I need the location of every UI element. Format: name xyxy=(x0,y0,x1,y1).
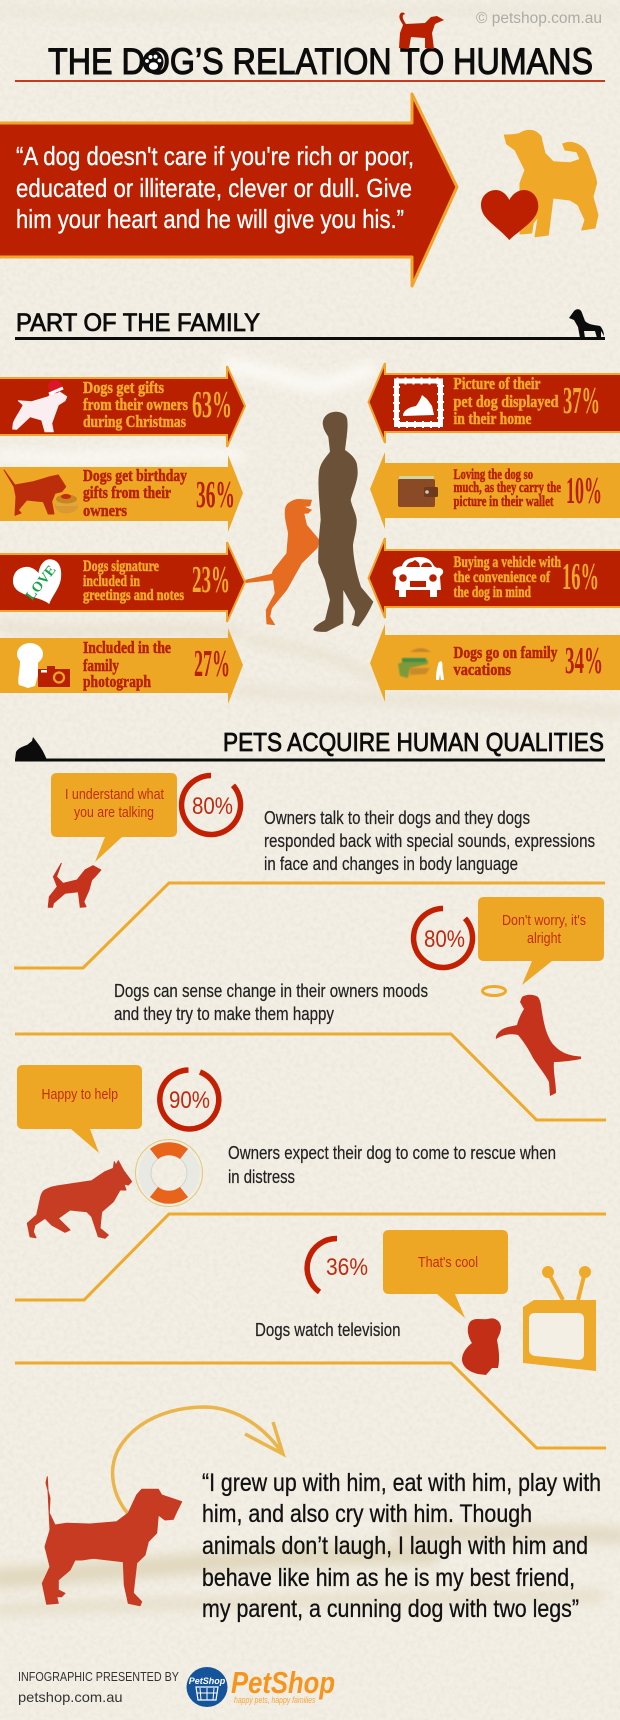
icon: white dog with camera xyxy=(17,643,70,688)
speech bubble xyxy=(17,1065,142,1153)
icon: red dog standing on title xyxy=(399,12,444,49)
panel: dogs get gifts during Christmas: from their owners xyxy=(83,395,188,414)
panel: dogs get gifts during Christmas: Dogs get gifts xyxy=(83,378,164,397)
panel: dogs rescue: Owners expect their dog to come to rescue when xyxy=(228,1142,556,1163)
panel: dogs sense moods: Dogs can sense change in their owners moods xyxy=(114,980,428,1001)
banner arrow with quote: “A dog doesn't care if you're rich or poor, xyxy=(16,141,414,171)
panel: picture in the wallet xyxy=(370,452,620,529)
icon: television xyxy=(523,1266,596,1371)
speech bubble xyxy=(478,897,604,985)
panel: dogs signature in greetings: greetings and notes xyxy=(83,587,184,604)
icon: white car with dog xyxy=(393,557,443,597)
icon: white heart with love: LOVE xyxy=(23,563,60,604)
icon: dog xyxy=(48,863,101,907)
speech bubble xyxy=(51,773,177,862)
orange dog xyxy=(246,499,319,625)
panel: buying a vehicle xyxy=(368,538,620,618)
ring chart 36% xyxy=(307,1238,368,1292)
panel: dogs go on family vacations: Dogs go on family xyxy=(454,643,558,662)
panel: picture of dog in the home: pet dog displayed xyxy=(454,392,559,411)
ring chart 80% xyxy=(414,908,473,968)
footer: presenter credit xyxy=(18,1670,180,1705)
logo: petshop round badge: PetShop xyxy=(189,1676,226,1686)
panel: dogs watch television: Dogs watch television xyxy=(255,1319,400,1340)
icon: life buoy xyxy=(136,1140,202,1206)
panel: dogs talk xyxy=(48,773,595,907)
logo: petshop wordmark: PetShop xyxy=(231,1665,335,1700)
banner arrow with quote: educated or illiterate, clever or dull. Give xyxy=(16,173,412,203)
ring chart 80%: 80% xyxy=(192,793,233,820)
logo: petshop wordmark: happy pets, happy families xyxy=(234,1695,316,1705)
illustration: dog jumping on person xyxy=(246,412,373,632)
panel: dogs get gifts during Christmas: 63% xyxy=(192,384,232,426)
panel: dogs signature in greetings: 23% xyxy=(192,559,230,601)
panel: dogs watch television xyxy=(255,1230,596,1375)
panel: dogs signature in greetings xyxy=(0,542,245,622)
panel: dogs get birthday gifts: owners xyxy=(83,501,127,520)
icon: paw inside the letter O xyxy=(142,50,164,74)
panel: included in the family photograph: family xyxy=(83,656,119,675)
ring chart 80%: 80% xyxy=(424,926,465,953)
panel: picture of dog in the home xyxy=(368,363,620,443)
icon: black cat xyxy=(15,737,47,760)
panel: dogs get birthday gifts: 36% xyxy=(196,474,235,516)
panel: buying a vehicle: the dog in mind xyxy=(454,584,531,601)
panel: dogs get gifts during Christmas xyxy=(0,366,245,447)
speech bubble: Happy to help xyxy=(42,1086,118,1103)
speech bubble: That's cool xyxy=(418,1254,478,1271)
icon: deck chair and small dog xyxy=(398,648,444,680)
panel: included in the family photograph xyxy=(0,628,243,704)
logo: petshop round badge xyxy=(186,1667,228,1707)
panel: dogs sense moods xyxy=(114,897,604,1096)
panel: closing quote: him, and also cry with him. Though xyxy=(202,1500,532,1528)
icon: white framed dog picture xyxy=(396,381,440,424)
panel: included in the family photograph: 27% xyxy=(194,643,230,685)
banner arrow with quote: him your heart and he will give you his.” xyxy=(16,204,404,234)
icon: shepherd dog xyxy=(27,1161,132,1238)
icon: puppy xyxy=(462,1318,501,1375)
icon: bloodhound xyxy=(42,1477,182,1606)
panel: buying a vehicle: the convenience of xyxy=(454,569,551,586)
panel: dogs rescue: in distress xyxy=(228,1166,295,1187)
panel: dogs get gifts during Christmas: during Christmas xyxy=(83,412,186,431)
panel: closing quote xyxy=(42,1407,601,1623)
footer: presenter credit: petshop.com.au xyxy=(18,1689,123,1705)
heading: part of the family: PART OF THE FAMILY xyxy=(16,309,260,337)
panel: dogs get birthday gifts: Dogs get birthday xyxy=(83,466,187,485)
panel: dogs sense moods: and they try to make them happy xyxy=(114,1003,335,1024)
ring chart 90% xyxy=(160,1070,219,1129)
panel: dogs talk: Owners talk to their dogs and they dogs xyxy=(264,807,530,828)
panel: dogs go on family vacations: vacations xyxy=(454,660,511,679)
panel: dogs talk: in face and changes in body language xyxy=(264,853,518,874)
panel: picture in the wallet: picture in their wallet xyxy=(454,494,554,510)
panel: dogs rescue xyxy=(17,1065,556,1238)
banner arrow with quote xyxy=(0,94,457,286)
speech bubble: Don't worry, it's xyxy=(502,912,586,929)
icon: white heart with love xyxy=(13,559,61,604)
icon: jumping dog xyxy=(496,995,581,1096)
panel: dogs signature in greetings: Dogs signature xyxy=(83,558,159,575)
panel: dogs get birthday gifts xyxy=(0,455,243,532)
panel: picture in the wallet: much, as they carry the xyxy=(454,480,561,496)
panel: picture in the wallet: Loving the dog so xyxy=(454,467,533,483)
icon: black dog xyxy=(569,309,604,338)
panel: picture of dog in the home: in their home xyxy=(454,409,532,428)
panel: included in the family photograph: photograph xyxy=(83,672,151,691)
speech bubble xyxy=(383,1230,508,1318)
icon: heart xyxy=(481,190,538,240)
arrow: curved xyxy=(113,1407,283,1515)
icon: dog and birthday cake xyxy=(4,470,78,515)
icon: white dog with santa hat xyxy=(13,380,67,432)
footer: presenter credit: INFOGRAPHIC PRESENTED BY xyxy=(18,1670,180,1684)
copyright note: © petshop.com.au xyxy=(476,10,602,27)
panel: dogs go on family vacations xyxy=(370,624,620,702)
speech bubble: alright xyxy=(527,930,562,947)
icon: frisbee xyxy=(482,986,506,996)
icon: brown wallet xyxy=(398,476,438,507)
ring chart 36%: 36% xyxy=(326,1254,368,1281)
person silhouette xyxy=(313,412,373,632)
speech bubble: you are talking xyxy=(74,804,154,821)
panel: buying a vehicle: Buying a vehicle with xyxy=(454,554,561,571)
panel: dogs signature in greetings: included in xyxy=(83,573,140,590)
ring chart 90%: 90% xyxy=(169,1087,210,1114)
speech bubble: I understand what xyxy=(65,786,165,803)
ring chart 80% xyxy=(182,776,241,834)
panel: dogs get birthday gifts: gifts from their xyxy=(83,483,171,502)
panel: included in the family photograph: Included in the xyxy=(83,638,171,657)
icon: golden dog xyxy=(504,130,598,237)
panel: picture of dog in the home: Picture of their xyxy=(454,374,541,393)
